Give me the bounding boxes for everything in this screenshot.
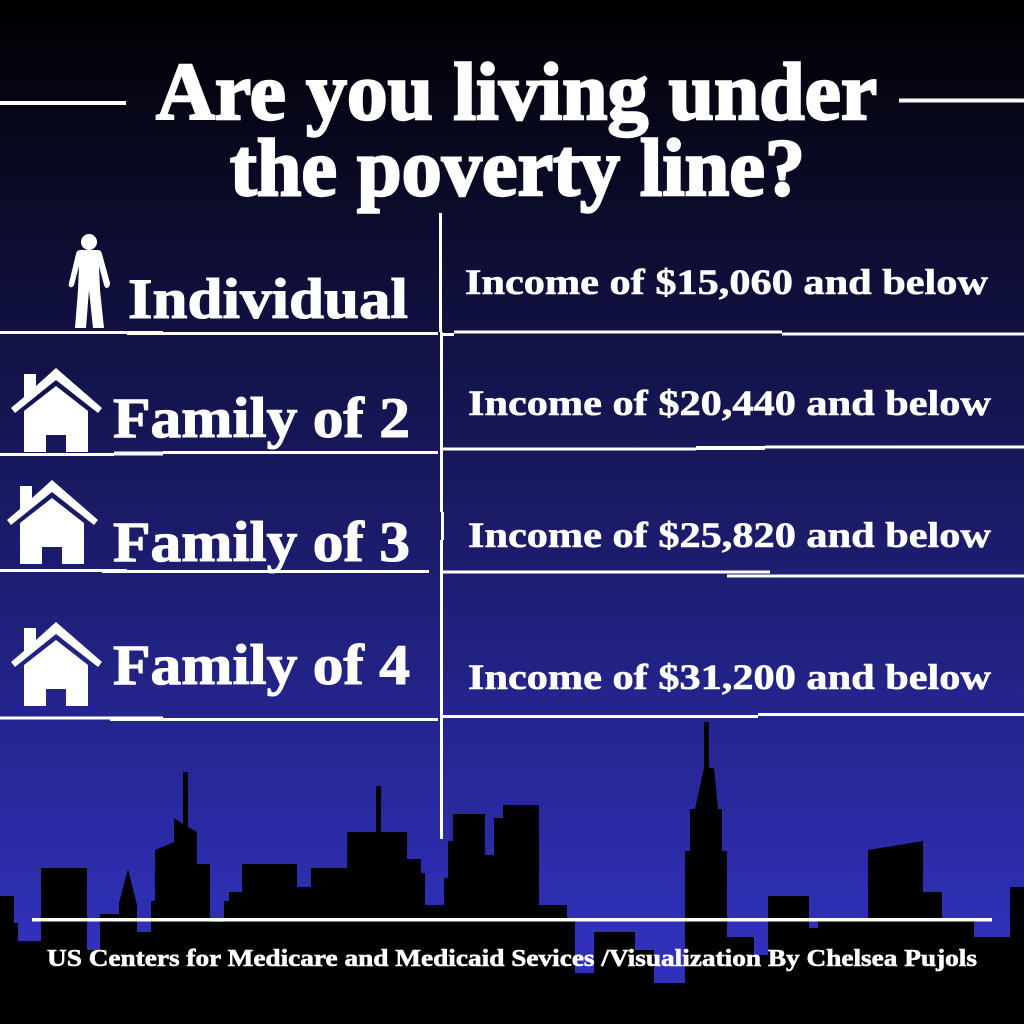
label: Individual: Individual — [128, 268, 408, 331]
icon: house family of 3 — [7, 480, 98, 564]
title rule right — [899, 98, 1024, 102]
row 4 divider left — [0, 716, 438, 721]
row 4 divider right — [441, 713, 1024, 718]
source credit: US Centers for Medicare and Medicaid Sevices /Visualization By Chelsea Pujols — [47, 946, 977, 972]
row 2 divider right — [440, 446, 1024, 450]
icon: house family of 4 — [11, 622, 102, 706]
income: family of 3: Income of $25,820 and below — [468, 515, 991, 555]
label: Family of 3: Family of 3 — [113, 511, 410, 574]
row 1 divider left — [0, 331, 438, 335]
vertical divider — [439, 213, 444, 839]
footer rule — [32, 918, 992, 922]
income: family of 2: Income of $20,440 and below — [468, 383, 991, 423]
row 3 divider right — [443, 570, 1024, 578]
row 1 divider right — [441, 330, 1024, 336]
income: family of 4: Income of $31,200 and below — [468, 657, 991, 697]
title rule left — [0, 101, 126, 105]
icon: person — [69, 234, 110, 328]
skyline silhouette — [0, 722, 1024, 1024]
label: Family of 2: Family of 2 — [113, 387, 410, 450]
income: individual: Income of $15,060 and below — [465, 262, 988, 302]
title — [156, 46, 877, 213]
title: the poverty line? — [230, 122, 805, 213]
label: Family of 4: Family of 4 — [113, 634, 410, 697]
row 2 divider left — [0, 451, 438, 456]
title: Are you living under — [156, 46, 877, 137]
icon: house family of 2 — [11, 368, 102, 452]
row 3 divider left — [0, 569, 429, 573]
